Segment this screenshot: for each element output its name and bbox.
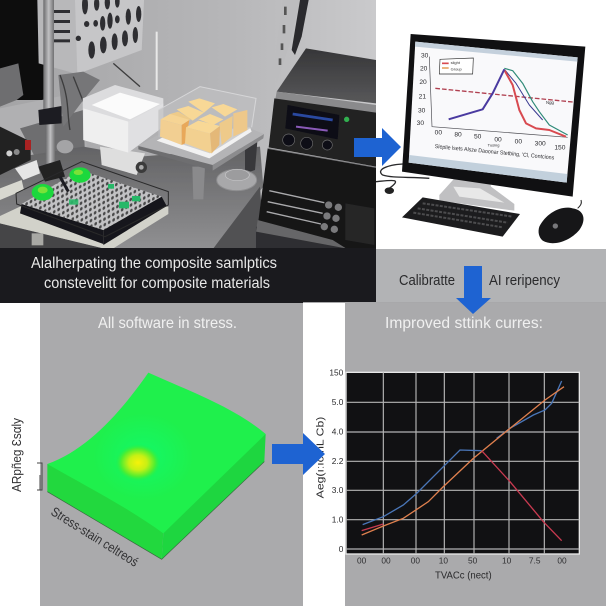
arrow: simulation to curves bbox=[272, 433, 325, 475]
panel: computer monitor with analysis software bbox=[376, 34, 585, 243]
green sample blobs bbox=[69, 167, 91, 183]
left instrument bbox=[0, 127, 31, 175]
panel: lab photo of composite sample preparation bbox=[0, 0, 376, 250]
stand bbox=[439, 177, 514, 211]
legend box bbox=[439, 58, 473, 74]
small chart axis labels: 30 bbox=[421, 52, 429, 59]
caption text: constevelitt for composite materials bbox=[44, 275, 270, 292]
panel: stress simulation background bbox=[40, 303, 303, 606]
band label right: AI reripency bbox=[489, 272, 560, 289]
small chart axis labels: Sleplie lsets Alsze Daoonar Stetbing, 'Cl, Contcions bbox=[434, 144, 555, 162]
panel: improved curves background bbox=[303, 302, 606, 606]
small chart axis labels: 00 bbox=[515, 138, 522, 145]
y axis values: 2.2 bbox=[332, 456, 344, 466]
monitor bezel bbox=[402, 34, 585, 197]
y axis values: 5.0 bbox=[332, 397, 344, 407]
dark background at left bbox=[0, 0, 47, 100]
legend box: slight bbox=[451, 60, 461, 65]
caption text bbox=[31, 255, 277, 292]
screen bbox=[409, 42, 578, 183]
keyboard bbox=[402, 197, 520, 237]
small chart axis labels: Tusing bbox=[488, 143, 499, 148]
photo caption band bbox=[0, 248, 376, 303]
perforated box bbox=[37, 0, 144, 74]
small chart axis labels: 30 bbox=[417, 120, 424, 127]
y axis values: 4.0 bbox=[332, 427, 344, 437]
small chart axis labels: 20 bbox=[420, 66, 428, 73]
sample grid base bbox=[0, 223, 103, 248]
legend box: Group bbox=[451, 67, 463, 72]
dark cables under box bbox=[58, 72, 100, 127]
x axis values: 00 bbox=[381, 556, 391, 566]
band label left: Calibratte bbox=[399, 272, 455, 289]
hot spot bbox=[115, 444, 161, 481]
x axis values bbox=[357, 556, 567, 566]
small chart axis labels: 150 bbox=[554, 144, 566, 151]
y axis values: 0 bbox=[339, 544, 344, 554]
petri dish bbox=[217, 169, 257, 191]
small chart axis labels: 20 bbox=[419, 79, 427, 86]
stacked electronics bbox=[256, 48, 376, 250]
band: calibrate step bbox=[376, 249, 606, 302]
tray of foam blocks bbox=[138, 87, 264, 199]
x axis values: 00 bbox=[557, 556, 567, 566]
sample grid bbox=[20, 204, 103, 244]
panel heading: All software in stress. bbox=[98, 315, 237, 332]
chart: improved stress-strain curves bbox=[315, 368, 579, 581]
x axis values: 00 bbox=[357, 556, 367, 566]
small chart axis labels: 300 bbox=[535, 140, 546, 147]
cable bbox=[376, 164, 429, 188]
small chart bbox=[429, 57, 573, 137]
x axis values: 7.5 bbox=[529, 556, 541, 566]
small chart axis labels: 21 bbox=[419, 93, 426, 100]
y axis title: Aeg(ıːıc nL Cb) bbox=[315, 417, 326, 498]
pole and clamp bbox=[43, 0, 54, 110]
small chart axis labels bbox=[417, 52, 566, 162]
cables and wall frame bbox=[274, 0, 300, 83]
y axis values: 150 bbox=[329, 368, 344, 378]
desk bbox=[0, 147, 263, 248]
y axis values: 3.0 bbox=[332, 485, 344, 495]
foam blocks bbox=[233, 110, 247, 137]
flask bbox=[57, 140, 73, 153]
blue curve bbox=[363, 381, 562, 525]
small chart axis labels: 30 bbox=[418, 108, 426, 115]
x axis values: 10 bbox=[439, 556, 448, 566]
arrow: calibrate down bbox=[456, 266, 491, 314]
panel heading: Improved sttink curres: bbox=[385, 315, 543, 332]
x axis values: 10 bbox=[502, 556, 512, 566]
y axis values: 1.0 bbox=[332, 514, 344, 524]
caption text: Alalherpating the composite samlptics bbox=[31, 255, 277, 272]
x axis title: TVACc (nect) bbox=[435, 570, 492, 581]
small chart axis labels: 50 bbox=[474, 134, 482, 141]
small chart axis labels: 00 bbox=[435, 129, 442, 136]
red curve bbox=[362, 451, 562, 541]
x axis values: 50 bbox=[468, 556, 478, 566]
orange curve bbox=[362, 387, 564, 535]
x axis values: 00 bbox=[411, 556, 420, 566]
small chart axis labels: Ngg bbox=[546, 100, 555, 105]
diagonal axis label: Stress-stain celtreoś bbox=[48, 504, 142, 570]
small chart axis labels: 00 bbox=[494, 136, 502, 143]
white container bbox=[100, 147, 145, 175]
mouse bbox=[539, 208, 584, 243]
small chart axis labels: 80 bbox=[454, 132, 462, 139]
y axis values bbox=[329, 368, 344, 554]
vertical axis label: ARpñeg Ɛsαly bbox=[9, 418, 24, 492]
axis bracket bbox=[37, 463, 42, 490]
green stress block 3D model bbox=[47, 373, 266, 559]
gripper bbox=[60, 177, 68, 192]
arrow: photo to monitor bbox=[354, 128, 401, 166]
